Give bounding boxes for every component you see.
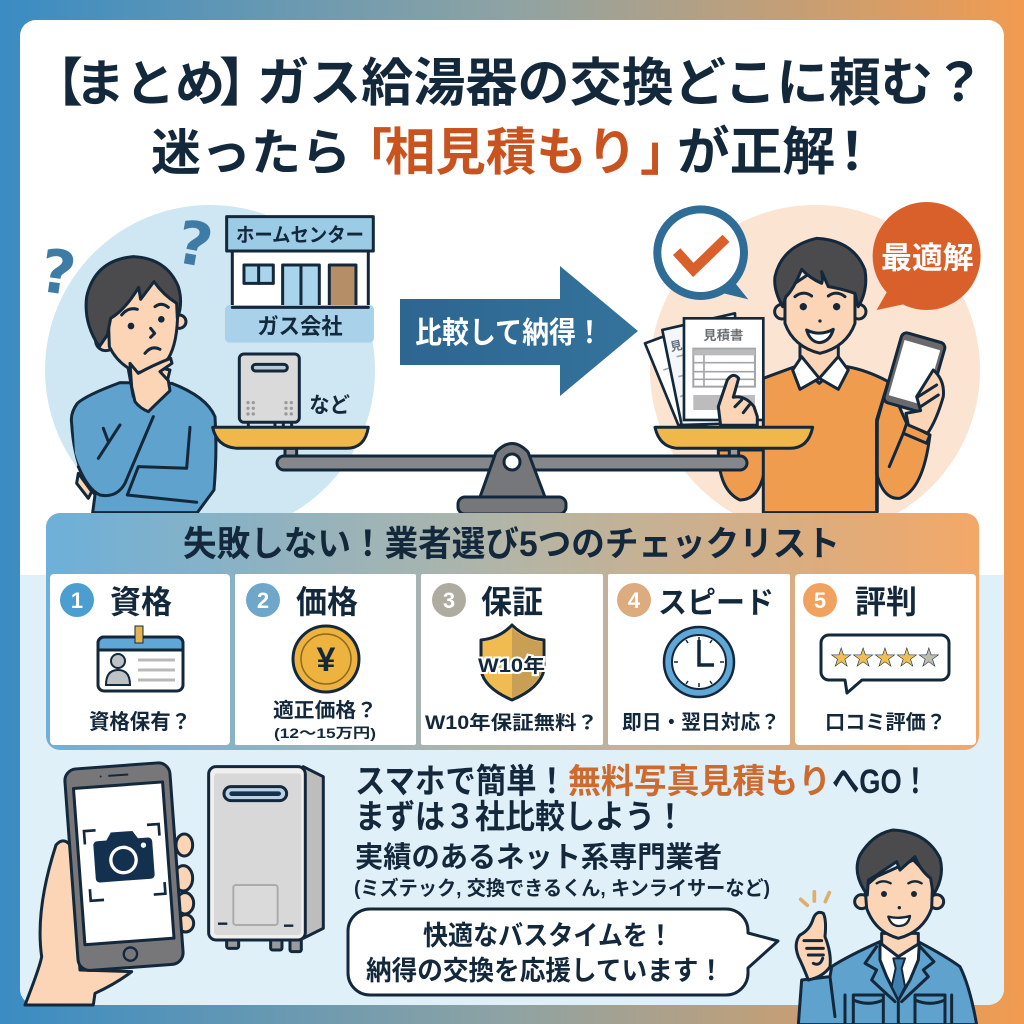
card 4: speed [608, 574, 790, 745]
large water heater [209, 767, 323, 952]
card 3: warranty [421, 574, 603, 745]
panel: five-point checklist [46, 513, 979, 750]
gas company label [225, 305, 374, 343]
title: まとめ [75, 56, 225, 112]
call-to-action text [354, 763, 929, 900]
staff man giving thumbs up [796, 830, 977, 1024]
balance scale beam and stand [277, 444, 747, 514]
water heater on the pan [239, 354, 299, 426]
arrow: compare and be satisfied: 比較して納得！ [415, 317, 603, 350]
sparkle lines [801, 892, 829, 905]
card 5: reputation: 5 [814, 588, 826, 613]
right scene: happy man [645, 202, 981, 513]
speech bubble [348, 909, 778, 995]
title: 】 [219, 55, 271, 113]
hand holding smartphone with camera [25, 762, 194, 1005]
icon: question marks: ? [36, 236, 80, 310]
card 2: price [235, 574, 416, 745]
left scale pan [213, 427, 368, 458]
title: 「 [342, 125, 392, 181]
title: ！ [826, 124, 878, 182]
pointing hand [718, 375, 757, 425]
finger lines [735, 400, 749, 413]
call-to-action text: 実績のあるネット系専門業者 [355, 841, 722, 874]
smartphone [64, 762, 184, 971]
call-to-action text: スマホで簡単！ [355, 763, 567, 801]
card 2: price: 価格 [296, 584, 358, 620]
card 3: warranty: 保証 [481, 584, 543, 620]
title: が正解 [677, 124, 835, 182]
card 1: qualification [50, 574, 230, 745]
speech bubble: 快適なバスタイムを！ [423, 921, 673, 951]
card 5: reputation: 口コミ評価？ [825, 711, 946, 734]
orange bubble: best solution: 最適解 [881, 242, 974, 276]
left background circle [45, 205, 375, 535]
card 3: warranty: 3 [443, 588, 455, 613]
card 1: qualification: 1 [71, 588, 83, 613]
title [31, 55, 985, 182]
card 2: price: 2 [257, 588, 269, 613]
right background circle [650, 205, 980, 535]
card 5: reputation: ★★★★★ [830, 643, 940, 672]
call-to-action text: 無料写真見積もり [568, 763, 831, 801]
card 2: price: 適正価格？ [273, 699, 377, 722]
gas company label: ガス会社 [257, 314, 343, 339]
card 2: price: ¥ [317, 641, 336, 679]
panel heading: 失敗しない！業者選び5つのチェックリスト [183, 525, 840, 564]
panel frame and header [46, 513, 979, 750]
home center building [227, 217, 373, 307]
hand [25, 834, 194, 1005]
worried man [71, 257, 216, 513]
title: 迷ったら [151, 125, 351, 181]
head [855, 830, 944, 957]
speech bubble: 納得の交換を応援しています！ [366, 956, 724, 986]
estimate documents [645, 313, 763, 425]
home center building: ホームセンター [236, 225, 364, 247]
card 5: reputation [795, 574, 976, 745]
icon: question marks [36, 207, 218, 310]
call-to-action text: (ミズテック, 交換できるくん, キンライサーなど) [354, 876, 770, 900]
lower light blue area [20, 575, 1004, 1005]
happy man [718, 238, 930, 513]
estimate documents: 見 [669, 338, 684, 354]
card 1: qualification: 資格 [110, 584, 172, 620]
thumbs-up hand [796, 912, 830, 980]
jacket [798, 942, 977, 1024]
title: 」 [640, 125, 690, 181]
title: ガス給湯器の交換どこに頼む？ [257, 55, 985, 113]
icon: camera [84, 824, 166, 901]
estimate documents: 見積書 [703, 327, 744, 342]
right scale pan [655, 427, 813, 458]
orange bubble: best solution [873, 202, 981, 310]
title: 【 [31, 55, 83, 113]
check mark speech bubble [657, 209, 748, 299]
card 2: price: (12〜15万円) [274, 725, 376, 741]
card 3: warranty: W10年保証無料？ [425, 711, 598, 734]
left scene: worried man and options [36, 207, 374, 513]
call-to-action text: まずは３社比較しよう！ [355, 798, 685, 835]
card 4: speed: スピード [658, 587, 774, 620]
call-to-action text: へGO！ [832, 763, 929, 801]
card 4: speed: 即日・翌日対応？ [622, 711, 780, 734]
arrow: compare and be satisfied [400, 266, 638, 396]
card 5: reputation: 評判 [855, 584, 917, 620]
smartphone held up [883, 332, 946, 443]
card 3: warranty: W10年 [478, 654, 545, 677]
shirt and tie [830, 943, 952, 1024]
card 1: qualification: 資格保有？ [89, 711, 191, 734]
icon: question marks: ? [171, 207, 218, 282]
text: etc: など [309, 394, 350, 418]
title: 相見積もり [385, 124, 637, 181]
card 4: speed: 4 [628, 588, 641, 613]
